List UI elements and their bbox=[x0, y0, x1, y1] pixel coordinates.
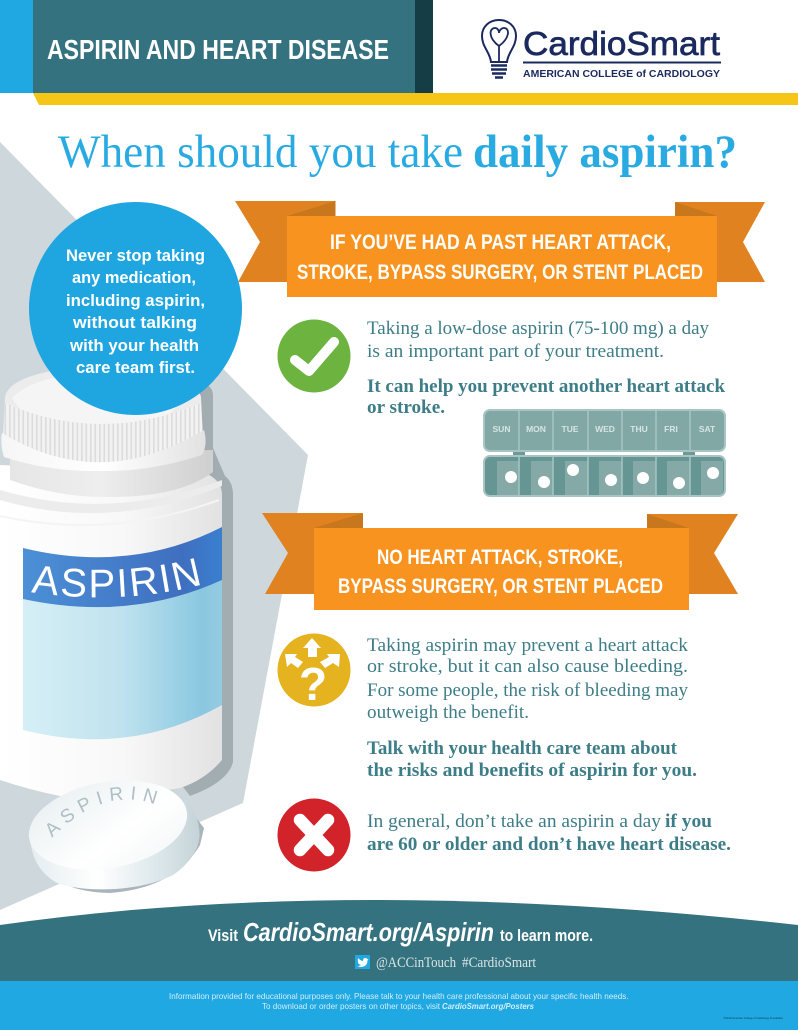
label: blue band bbox=[23, 527, 222, 607]
icon: yellow question with arrows bbox=[278, 634, 350, 710]
icon: yellow question with arrows: ? bbox=[299, 658, 327, 710]
illustration: weekly pill box bbox=[484, 410, 725, 496]
logo tagline: AMERICAN COLLEGE of CARDIOLOGY bbox=[523, 69, 720, 80]
callout text: care team first. bbox=[76, 358, 195, 377]
banner text bbox=[297, 231, 703, 284]
banner text: STROKE, BYPASS SURGERY, OR STENT PLACED bbox=[297, 261, 703, 284]
main heading: daily aspirin? bbox=[473, 126, 737, 178]
text block: no heart attack advice: the risks and benefits of aspirin for you. bbox=[367, 760, 697, 781]
icon: twitter bbox=[355, 955, 370, 969]
text block: no heart attack advice: Talk with your health care team about bbox=[367, 738, 678, 759]
header band bbox=[0, 0, 798, 105]
footer call to action: to learn more. bbox=[500, 926, 593, 945]
callout text: with your health bbox=[69, 336, 199, 355]
callout text: without talking bbox=[72, 313, 197, 332]
text block: past heart attack advice: Taking a low-dose aspirin (75-100 mg) a day bbox=[367, 318, 709, 339]
cap collar bbox=[1, 430, 206, 471]
text block: no heart attack advice: Taking aspirin may prevent a heart attack bbox=[367, 635, 689, 656]
callout text bbox=[66, 246, 205, 377]
icon: light bulb with heart bbox=[482, 20, 516, 78]
disclaimer text bbox=[169, 991, 628, 1011]
tablet shadow bbox=[40, 810, 204, 893]
social handles: #CardioSmart bbox=[462, 955, 537, 971]
day labels: FRI bbox=[664, 424, 678, 434]
disclaimer text: To download or order posters on other topics, visit bbox=[262, 1001, 441, 1011]
pill box hinges bbox=[513, 449, 525, 457]
text block: general advice bbox=[367, 811, 731, 855]
bottle neck bbox=[10, 450, 213, 497]
day labels bbox=[493, 424, 716, 434]
text block: no heart attack advice: For some people, the risk of bleeding may bbox=[367, 680, 688, 701]
day labels: SAT bbox=[699, 424, 716, 434]
text block: no heart attack advice: outweigh the benefit. bbox=[367, 702, 529, 723]
bottle shadow bbox=[170, 385, 233, 796]
day labels: THU bbox=[630, 424, 648, 434]
bottle cap bbox=[1, 367, 206, 471]
illustration: aspirin bottle bbox=[0, 372, 233, 796]
callout circle bbox=[29, 202, 242, 415]
text block: general advice: if you bbox=[665, 811, 712, 832]
illustration: aspirin tablet bbox=[28, 782, 204, 893]
text block: past heart attack advice: It can help you prevent another heart attack bbox=[367, 376, 725, 397]
pill box base bbox=[484, 456, 725, 496]
social handles bbox=[376, 955, 537, 971]
banner text: BYPASS SURGERY, OR STENT PLACED bbox=[338, 575, 663, 598]
pills bbox=[505, 464, 719, 489]
banner text bbox=[338, 546, 663, 598]
banner: past heart attack bbox=[235, 201, 765, 297]
label text: ASPIRIN bbox=[31, 558, 200, 598]
footer call to action: CardioSmart.org/Aspirin bbox=[243, 917, 494, 947]
header title: ASPIRIN AND HEART DISEASE bbox=[47, 34, 389, 65]
text block: past heart attack advice: or stroke. bbox=[367, 397, 445, 418]
social handles: @ACCinTouch bbox=[376, 955, 456, 971]
bottle body bbox=[0, 465, 222, 796]
copyright: ©2019 American College of Cardiology Foundation bbox=[724, 1016, 783, 1020]
callout text: including aspirin, bbox=[66, 291, 205, 310]
day labels: WED bbox=[595, 424, 615, 434]
day labels: SUN bbox=[493, 424, 510, 434]
text block: past heart attack advice bbox=[367, 318, 725, 418]
logo: CardioSmart bbox=[482, 20, 721, 80]
text block: general advice: In general, don’t take an aspirin a day bbox=[367, 811, 662, 832]
background grey shape bbox=[0, 142, 308, 910]
pill box lid bbox=[484, 410, 725, 451]
text block: general advice: are 60 or older and don’t have heart disease. bbox=[367, 834, 731, 855]
tablet imprint: ASPIRIN bbox=[47, 786, 158, 838]
tablet side bbox=[30, 800, 200, 889]
main heading bbox=[58, 126, 737, 178]
day labels: MON bbox=[526, 424, 546, 434]
footer call to action: Visit bbox=[208, 926, 238, 945]
icon: red X bbox=[278, 798, 350, 872]
text block: past heart attack advice: is an important part of your treatment. bbox=[367, 341, 664, 362]
day labels: TUE bbox=[562, 424, 579, 434]
logo wordmark: CardioSmart bbox=[523, 25, 720, 62]
banner: no heart attack bbox=[262, 513, 738, 610]
disclaimer text: Information provided for educational purposes only. Please talk to your health care professional about your specific health needs. bbox=[169, 991, 628, 1001]
main heading: When should you take bbox=[58, 126, 463, 178]
disclaimer text: CardioSmart.org/Posters bbox=[442, 1001, 534, 1011]
banner text: NO HEART ATTACK, STROKE, bbox=[377, 546, 623, 569]
banner text: IF YOU’VE HAD A PAST HEART ATTACK, bbox=[330, 231, 671, 254]
text block: no heart attack advice bbox=[367, 635, 697, 781]
label: light blue panel bbox=[23, 580, 222, 739]
callout text: any medication, bbox=[72, 268, 196, 287]
text block: no heart attack advice: or stroke, but it can also cause bleeding. bbox=[367, 656, 688, 677]
footer: blue disclaimer band bbox=[0, 981, 798, 1030]
tablet top face bbox=[22, 769, 194, 881]
footer: teal band bbox=[0, 900, 798, 981]
icon: green check bbox=[278, 320, 350, 392]
callout text: Never stop taking bbox=[66, 246, 205, 265]
